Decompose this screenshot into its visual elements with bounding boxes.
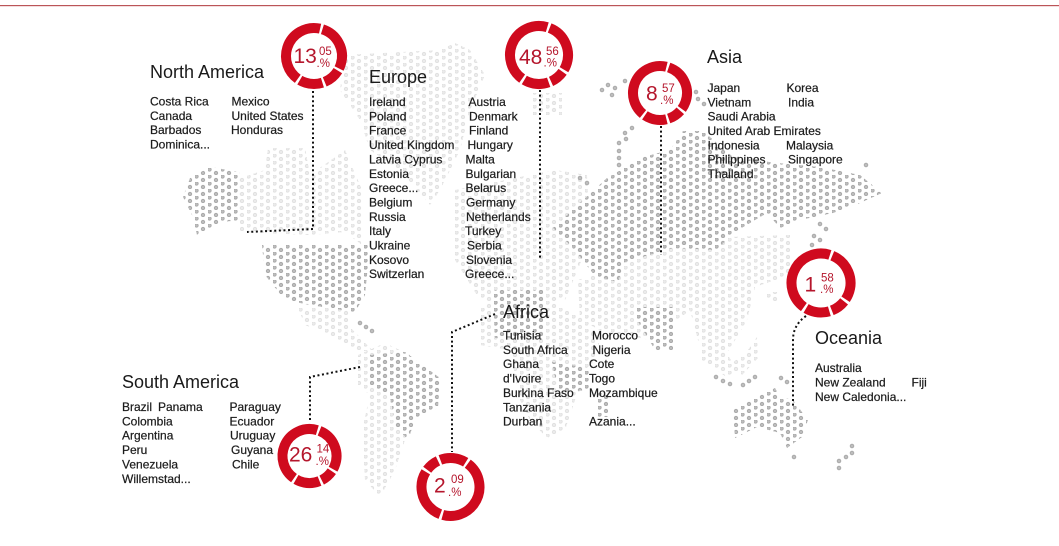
donut: Europe 48.56%: 48 [519,46,542,69]
country list: Asia: United Arab Emirates [708,124,821,138]
country list: Europe: Russia [369,210,406,224]
donut: Africa 2.09%: .% [448,487,461,499]
panel: Africa [503,302,658,429]
country list: Asia [708,81,843,181]
donut: Africa 2.09% [410,446,491,528]
donut: South America 26.14%: 14 [316,444,330,456]
country list: Oceania: Australia [815,361,862,375]
donut: Europe 48.56%: 56 [546,46,559,58]
country list: Europe: Serbia [467,238,502,252]
country list: South America: Willemstad... [122,472,191,486]
donut: Oceania 1.58%: 58 [821,273,834,285]
country list: Europe: Kosovo [369,253,409,267]
country list: Asia: India [788,95,814,109]
country list: Europe: France [369,124,407,138]
country list: North America: Dominica... [150,138,210,152]
country list: South America: Colombia [122,414,173,428]
country list: Europe: Greece... [465,267,514,281]
leader line: Oceania [793,316,806,408]
country list: Asia: Singapore [788,153,843,167]
country list: Africa: Azania... [589,415,636,429]
country list: Europe: Ukraine [369,238,411,252]
heading: South America: South America [122,372,240,392]
country list: North America: Canada [150,109,192,123]
country list: North America: Honduras [231,123,283,137]
panel: South America [122,372,281,486]
panel: Asia [707,47,843,181]
country list: Africa: Morocco [592,328,638,342]
country list: Europe: Finland [469,124,508,138]
leader line: Africa [452,314,495,452]
country list: Africa: South Africa [503,343,568,357]
donut: Asia 8.57%: 57 [662,83,675,95]
country list: North America: United States [232,109,304,123]
country list: Oceania: New Zealand [815,376,886,390]
country list: Africa: Durban [503,415,542,429]
country list: Europe: Turkey [465,224,501,238]
leader line: Asia [660,126,662,255]
country list: Africa: Nigeria [592,343,631,357]
country list: Europe: Switzerlan [369,267,424,281]
donut: North America 13.05%: 05 [319,46,332,58]
donut: Asia 8.57% [626,59,694,127]
country list: Africa: Cote [589,357,615,371]
heading: Oceania: Oceania [815,328,883,348]
panel: Europe [369,67,531,281]
world map: dark dots [183,79,882,470]
country list: Africa: Tanzania [503,400,551,414]
country list: Europe: Netherlands [466,210,531,224]
country list: Africa: d'Ivoire [503,372,542,386]
country list: Europe: Greece... [369,181,418,195]
heading: Europe: Europe [369,67,427,87]
donut: North America 13.05% [279,21,349,91]
country list: South America: Chile [232,457,260,471]
country list: Africa: Togo [589,372,615,386]
donut: North America 13.05%: 13 [294,45,317,68]
donut: Oceania 1.58% [782,244,860,322]
donut: South America 26.14%: 26 [289,444,312,467]
country list: Asia: Saudi Arabia [708,110,776,124]
country list: Europe: Poland [369,109,406,123]
country list: Asia: Malaysia [786,138,834,152]
country list: Europe: Germany [466,196,515,210]
country list: Africa [503,328,658,429]
country list: North America: Barbados [150,123,201,137]
country list: South America: Brazil [122,400,152,414]
world map: light dots [240,43,790,497]
country list: South America: Guyana [231,443,273,457]
country list: Africa: Tunisia [503,328,542,342]
heading: Asia: Asia [707,47,743,67]
country list: Asia: Vietnam [708,95,751,109]
donut: Oceania 1.58%: 1 [804,274,816,296]
donut: Africa 2.09%: 09 [451,474,464,486]
top rule [0,5,1059,6]
country list: South America: Peru [122,443,147,457]
donut: South America 26.14%: .% [316,456,329,468]
donut: Asia 8.57%: 8 [646,82,658,106]
donut: Oceania 1.58%: .% [820,284,833,296]
country list: South America: Paraguay [230,400,281,414]
country list: South America: Panama [158,400,203,414]
leader line: North America [247,91,313,232]
panel: Oceania [815,328,927,404]
country list: Oceania: New Caledonia... [815,390,906,404]
country list: Oceania [815,361,927,404]
donut: Europe 48.56% [501,17,577,93]
country list: South America: Venezuela [122,457,178,471]
country list: Europe: Denmark [469,109,519,123]
country list: South America [122,400,281,486]
country list: Europe: Italy [369,224,391,238]
country list: Europe: Bulgarian [466,167,516,181]
country list: Europe: United Kingdom [369,138,454,152]
country list: Asia: Philippines [708,153,766,167]
donut: North America 13.05%: .% [316,58,330,70]
panel: North America [150,62,304,152]
country list: South America: Ecuador [230,414,274,428]
country list: Asia: Japan [708,81,740,95]
country list: Asia: Korea [786,81,819,95]
country list: Europe: Belgium [369,196,412,210]
country list: South America: Argentina [122,429,174,443]
heading: North America: North America [150,62,265,82]
country list: Africa: Mozambique [589,386,658,400]
country list: Europe: Latvia Cyprus [369,152,442,166]
donut: Africa 2.09%: 2 [434,475,446,498]
leader line: Europe [539,90,541,259]
donut: Asia 8.57%: .% [660,95,673,107]
heading: Africa: Africa [503,302,550,322]
country list: North America: Costa Rica [150,94,209,108]
country list: Asia: Indonesia [708,138,760,152]
country list: North America: Mexico [232,94,270,108]
country list: Europe: Malta [466,152,495,166]
country list: Africa: Burkina Faso [503,386,574,400]
country list: Europe: Slovenia [466,253,512,267]
leader line: South America [310,367,360,421]
country list: Europe [369,95,531,281]
country list: Europe: Austria [468,95,506,109]
country list: Africa: Ghana [503,357,539,371]
country list: Europe: Belarus [466,181,506,195]
country list: North America [150,94,304,152]
country list: Europe: Ireland [369,95,406,109]
country list: South America: Uruguay [230,429,275,443]
country list: Oceania: Fiji [912,376,927,390]
country list: Asia: Thailand [708,167,754,181]
donut: Europe 48.56%: .% [544,58,557,70]
country list: Europe: Estonia [369,167,409,181]
donut: South America 26.14% [274,421,345,491]
country list: Europe: Hungary [468,138,513,152]
